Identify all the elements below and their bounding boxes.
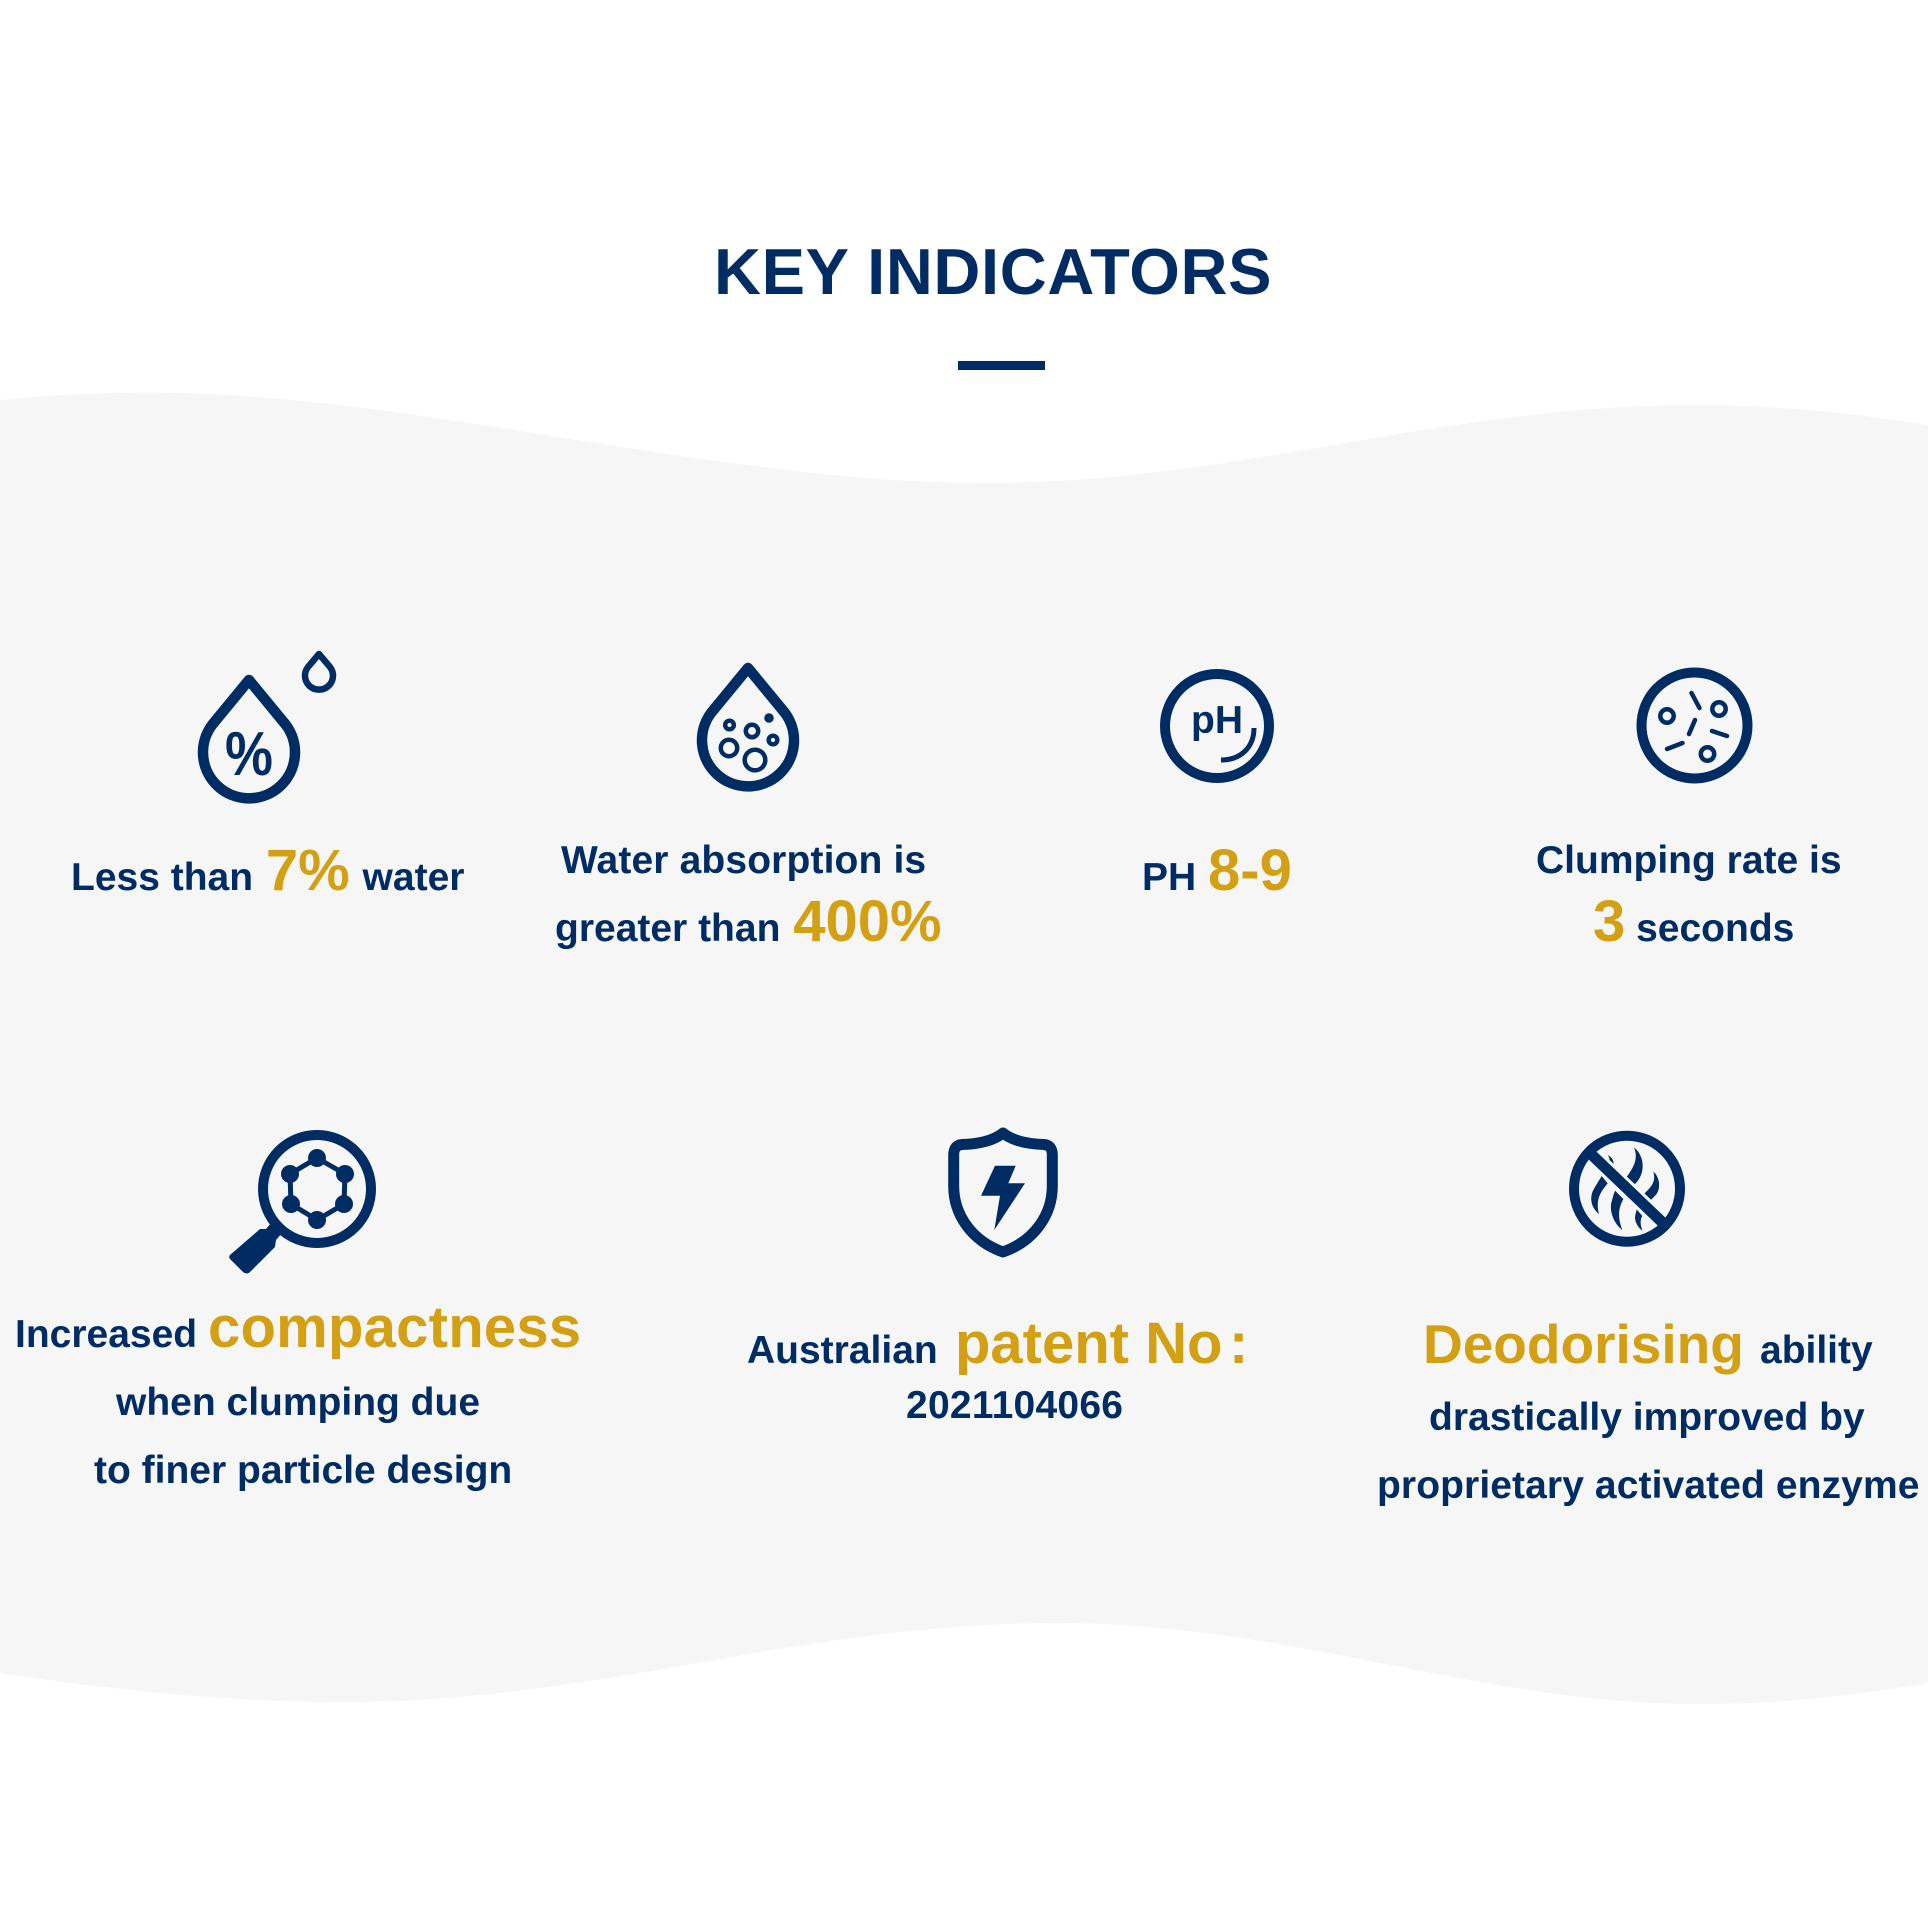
- panel: deodorising: proprietary activated enzyme: [1377, 1464, 1920, 1507]
- icon: pH circle: [1165, 674, 1269, 778]
- icon: shield with bolt: [954, 1133, 1052, 1252]
- panel: clumping rate: 3 seconds: [1593, 889, 1794, 954]
- icon: drop with bubbles: [702, 668, 794, 786]
- panel: deodorising: ability: [1760, 1329, 1873, 1372]
- icon: percent water drops: %: [225, 720, 273, 789]
- panel: patent: [747, 1133, 1248, 1427]
- icon: pH circle: pH: [1191, 699, 1243, 742]
- panel: compactness: to finer particle design: [94, 1449, 512, 1492]
- panel: water absorption: greater than 400%: [555, 889, 942, 954]
- text: Australian patent No: Australian: [747, 1329, 938, 1372]
- text: clumping rate: Clumping rate is: [1536, 839, 1842, 882]
- panel: water content: [71, 654, 464, 903]
- panel: compactness: [15, 1135, 581, 1492]
- panel: deodorising: drastically improved by: [1429, 1396, 1865, 1439]
- text: deodorising ability: Deodorising: [1423, 1313, 1744, 1375]
- icon: magnifier with molecule: [229, 1135, 371, 1274]
- panel: patent: 2021104066: [906, 1384, 1123, 1427]
- text: increased compactness: Increased compactness: [15, 1295, 581, 1360]
- title: KEY INDICATORS: [714, 235, 1272, 308]
- text: less than 7% water: Less than 7% water: [71, 838, 464, 903]
- text: water absorption: Water absorption is: [561, 839, 926, 882]
- icon: percent water drops: [203, 654, 333, 798]
- title underline: [958, 361, 1045, 370]
- panel: pH: [1142, 674, 1292, 903]
- icon: particles circle: [1642, 672, 1748, 778]
- panel: water absorption: [555, 668, 942, 954]
- wavy background band: [0, 393, 1928, 1704]
- panel: compactness: when clumping due: [115, 1381, 480, 1424]
- panel: clumping rate: [1536, 672, 1842, 954]
- text: Australian patent No: :: [1229, 1311, 1248, 1376]
- text: PH 8-9: PH 8-9: [1142, 838, 1292, 903]
- panel: deodorising: [1377, 1136, 1920, 1507]
- icon: no odour circle: [1574, 1136, 1680, 1242]
- text: Australian patent No: patent No: [955, 1311, 1222, 1376]
